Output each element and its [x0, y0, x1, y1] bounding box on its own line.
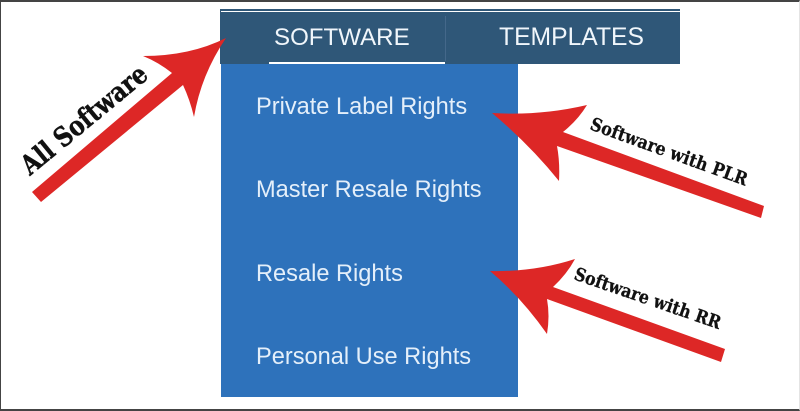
label: all software: All Software — [14, 59, 154, 182]
dropdown panel — [221, 64, 518, 397]
arrow: software with RR — [490, 259, 725, 362]
menu item: master resale rights: Master Resale Rights — [256, 177, 482, 203]
menu item: private label rights: Private Label Rights — [256, 94, 467, 120]
label: software with PLR: Software with PLR — [587, 114, 751, 191]
menu item: resale rights: Resale Rights — [256, 261, 403, 287]
tab: templates: TEMPLATES — [499, 24, 644, 51]
tab divider — [445, 16, 446, 61]
navigation bar — [220, 9, 680, 64]
arrow: software with PLR — [492, 105, 764, 218]
label: software with RR: Software with RR — [571, 264, 725, 334]
tab: software: SOFTWARE — [274, 24, 410, 51]
arrow: all software — [32, 38, 226, 202]
nav top highlight line — [221, 11, 680, 12]
active tab underline — [269, 62, 445, 64]
menu item: personal use rights: Personal Use Rights — [256, 344, 471, 370]
